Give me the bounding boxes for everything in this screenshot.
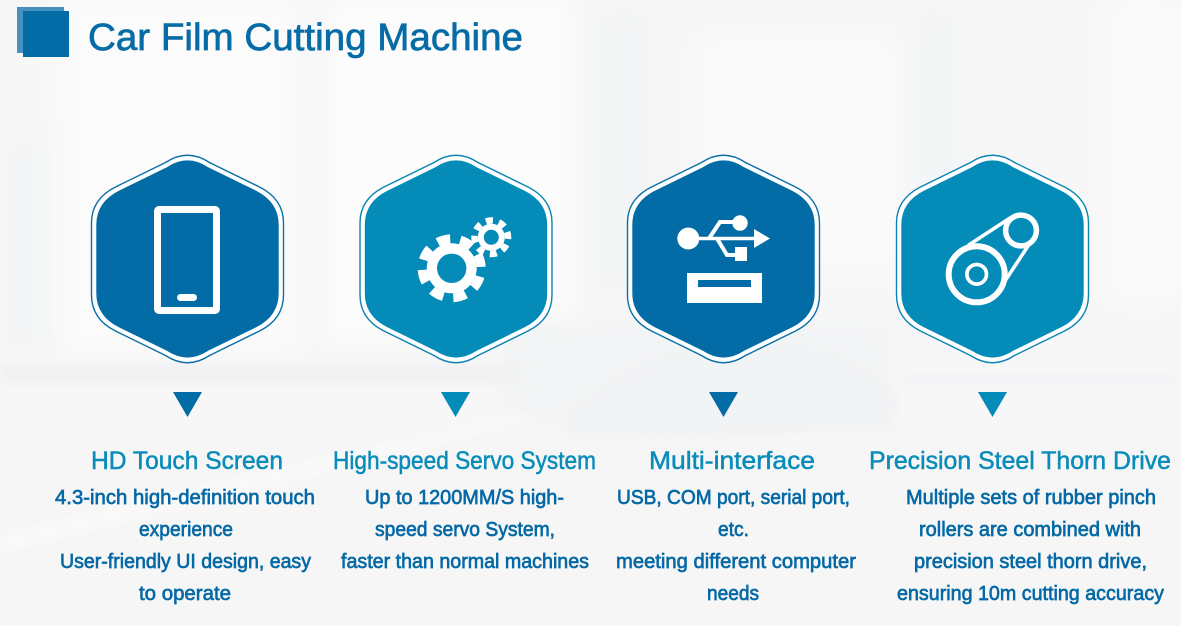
text block: HD Touch Screen: experience: [139, 519, 233, 541]
arrow: column 4: [978, 392, 1007, 417]
text block: HD Touch Screen: [55, 447, 315, 605]
hexagon badge: gears: [360, 155, 552, 363]
text block: Multi-interface: [616, 447, 856, 605]
text block: HD Touch Screen: User-friendly UI design, easy: [60, 551, 311, 573]
text block: Precision Steel Thorn Drive: [869, 447, 1171, 605]
text block: Multi-interface: meeting different computer: [616, 551, 856, 573]
text block: HD Touch Screen: 4.3-inch high-definition touch: [55, 487, 315, 509]
text block: HD Touch Screen: to operate: [139, 583, 231, 605]
icon: gears: [415, 215, 514, 305]
text block: Precision Steel Thorn Drive: Precision Steel Thorn Drive: [869, 447, 1171, 475]
text block: Precision Steel Thorn Drive: rollers are combined with: [919, 519, 1141, 541]
logo squares: [17, 7, 69, 57]
text block: Precision Steel Thorn Drive: Multiple sets of rubber pinch: [906, 487, 1156, 509]
hexagon badge: usb: [628, 155, 820, 363]
icon: belt and pulleys: [949, 215, 1036, 302]
text block: High-speed Servo System: [333, 447, 596, 573]
text block: High-speed Servo System: Up to 1200MM/S high-: [365, 487, 564, 509]
text block: Precision Steel Thorn Drive: ensuring 10m cutting accuracy: [897, 583, 1164, 605]
icon: phone: [158, 210, 216, 310]
arrow: column 2: [441, 392, 470, 417]
text block: Precision Steel Thorn Drive: precision steel thorn drive,: [914, 551, 1147, 573]
text block: High-speed Servo System: faster than normal machines: [341, 551, 589, 573]
hexagon badge: touch screen: [92, 155, 284, 363]
icon: usb symbol and port: [677, 215, 770, 303]
text block: Multi-interface: needs: [707, 583, 759, 605]
arrow: column 1: [173, 392, 202, 417]
text block: Multi-interface: etc.: [718, 519, 749, 541]
text block: Multi-interface: Multi-interface: [649, 447, 815, 475]
text block: High-speed Servo System: High-speed Servo System: [333, 447, 596, 475]
arrow: column 3: [709, 392, 738, 417]
title: Car Film Cutting Machine: [88, 17, 523, 59]
text block: High-speed Servo System: speed servo System,: [375, 519, 555, 541]
hexagon badge: belt drive: [896, 155, 1088, 363]
text block: Multi-interface: USB, COM port, serial port,: [617, 487, 850, 509]
text block: HD Touch Screen: HD Touch Screen: [91, 447, 283, 475]
